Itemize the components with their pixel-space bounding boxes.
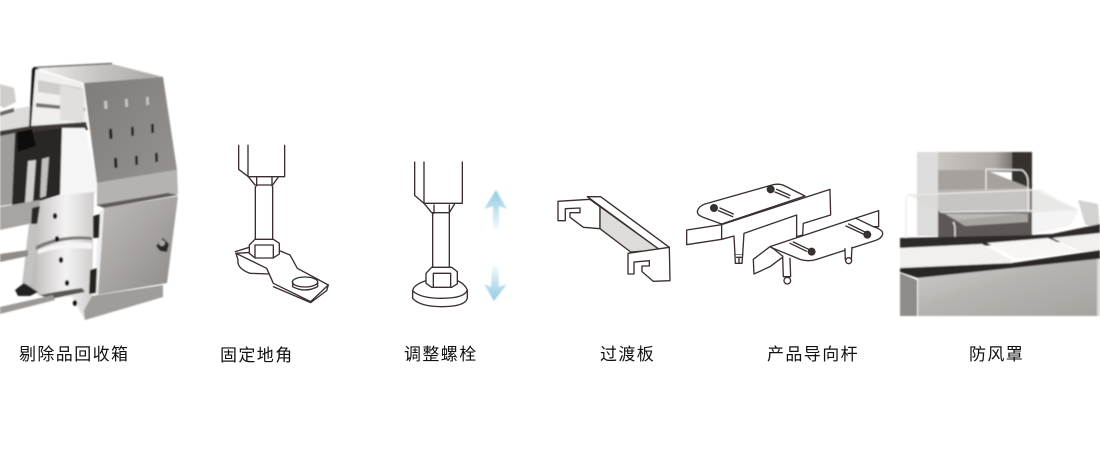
- machine column behind shield: [917, 152, 1032, 238]
- bin bottom skirt: [84, 285, 163, 320]
- photo: wind shield: [900, 152, 1100, 316]
- right edge strip: [1097, 259, 1100, 316]
- conveyor belts and frame: [900, 224, 1100, 278]
- label: wind shield: 防风罩: [969, 345, 1024, 364]
- bin top plate: [36, 64, 163, 83]
- lower cover panel: [918, 259, 1097, 316]
- curved shiny side panel: [24, 128, 98, 320]
- bin middle band: [97, 170, 178, 205]
- lower left frame: [900, 273, 917, 316]
- label: reject collection bin: 剔除品回收箱: [19, 345, 129, 364]
- icon: fixed foot: [235, 145, 328, 303]
- icon: down arrow: [484, 266, 507, 301]
- bin door: [89, 193, 178, 297]
- label: adjusting bolt: 调整螺栓: [404, 345, 478, 364]
- label: fixed foot: 固定地角: [220, 346, 294, 365]
- clear acrylic shield: [906, 169, 1100, 275]
- dark reject chute opening: [12, 128, 63, 205]
- label: product guide rods: 产品导向杆: [767, 345, 859, 364]
- label: transition plate: 过渡板: [600, 345, 655, 364]
- conveyor and clear guard behind bin: [0, 63, 112, 206]
- bin upper perforated panel: [84, 77, 177, 183]
- photo: reject collection bin: [0, 63, 178, 320]
- icon: transition plate: [558, 197, 670, 281]
- icon: adjusting bolt: [413, 162, 467, 307]
- icon: up arrow: [484, 190, 507, 229]
- base rails and frame: [0, 200, 55, 314]
- icon: product guide rods: [687, 184, 883, 284]
